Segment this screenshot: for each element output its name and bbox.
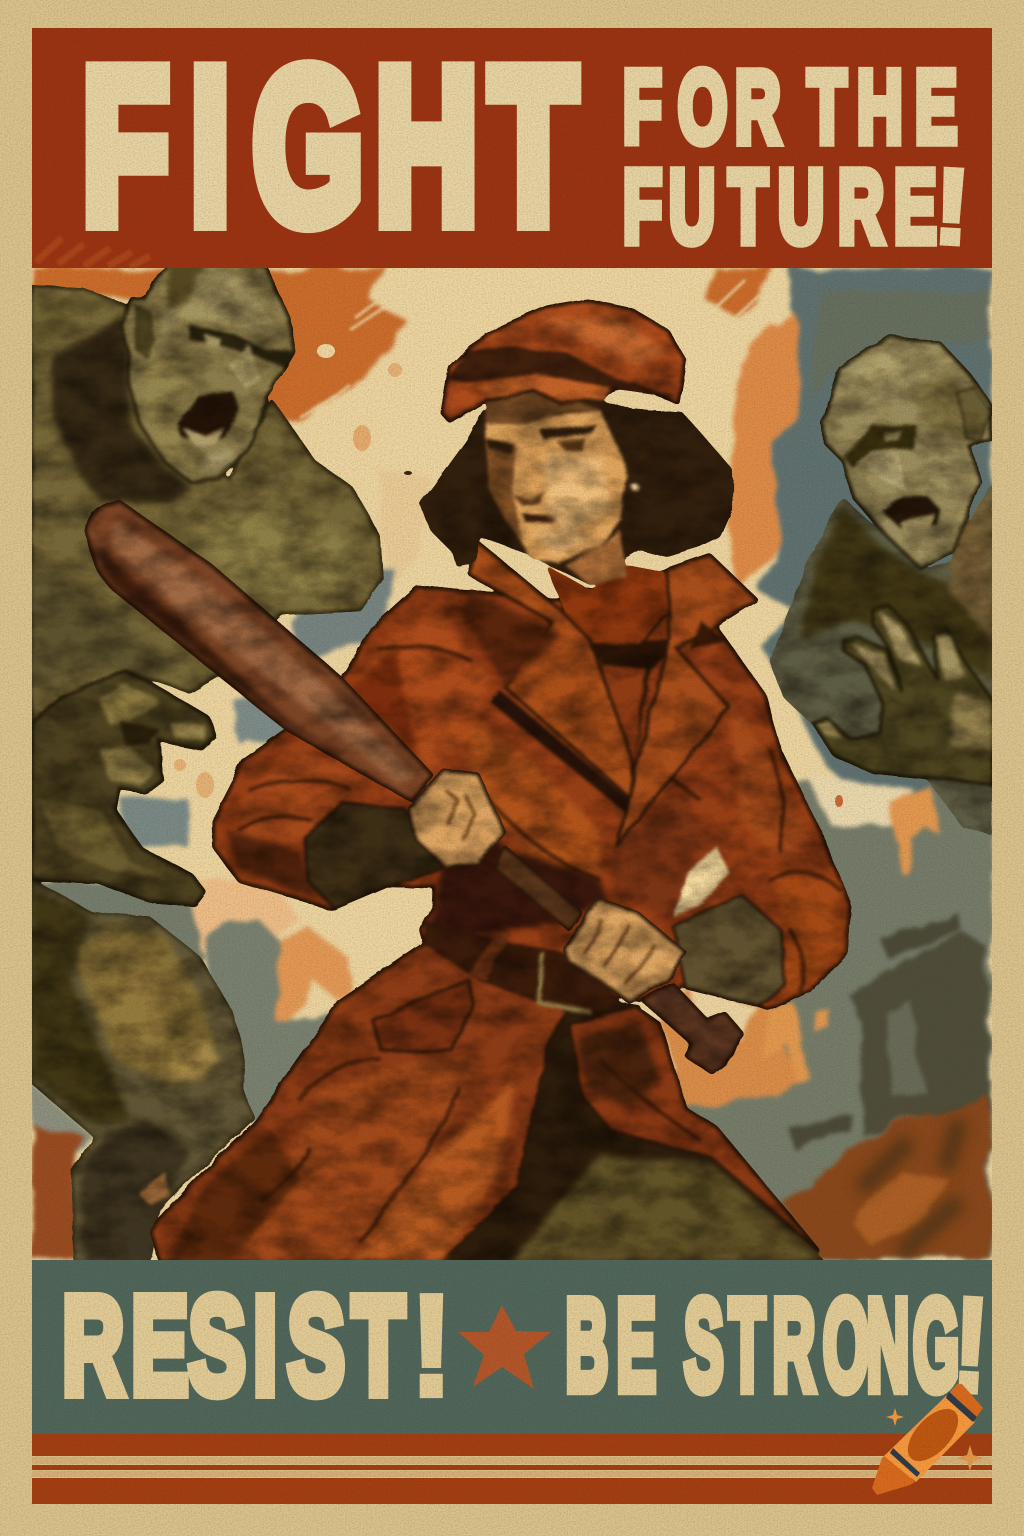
title: FIGHT: FIGHT: [82, 25, 577, 269]
bat handle: [495, 846, 582, 930]
bat highlight: [110, 520, 415, 785]
crayon body: [884, 1396, 975, 1482]
crayon bands: [890, 1392, 977, 1477]
fire detail: [850, 1170, 950, 1245]
fire right: [780, 1097, 990, 1260]
right cuff: [673, 895, 785, 1006]
collar and lapels: [460, 540, 757, 846]
icon: crayon logo: [872, 1384, 984, 1495]
belt: [425, 920, 620, 1013]
ogre head: [122, 251, 295, 483]
crayon cap: [950, 1384, 983, 1418]
sky and explosion background: [32, 268, 992, 1260]
woman head: [420, 300, 733, 630]
ogre chest shadow: [800, 505, 992, 680]
paint debris: [174, 344, 843, 812]
ogre chest highlight: [200, 500, 360, 600]
slogan: exclamation mark: !: [410, 1265, 453, 1427]
baseball bat: [87, 501, 742, 1073]
ogre hand: [813, 604, 992, 785]
ruins right: [790, 912, 992, 1150]
slogan: exclamation mark: !: [949, 1268, 993, 1421]
slogan: BE STRONG: BE STRONG: [565, 1274, 959, 1418]
banner brush streaks: [36, 238, 150, 267]
top banner: [32, 25, 992, 269]
bat shadow: [95, 545, 380, 780]
right ogre: [770, 336, 992, 835]
coat skirt: [150, 944, 820, 1262]
cream streaks: [300, 280, 760, 418]
illustration panel: [32, 251, 992, 1262]
face: [485, 388, 627, 562]
ogre body: [770, 480, 992, 835]
earring: [632, 484, 638, 490]
bat knob: [642, 984, 742, 1073]
ogre hand: [32, 670, 215, 905]
gripping hands: [408, 770, 686, 1002]
crayon tip: [872, 1455, 915, 1495]
left ogre: [32, 251, 382, 1262]
slogan: RESIST: RESIST: [62, 1269, 405, 1423]
crayon label: [899, 1400, 967, 1470]
title: FUTURE: FUTURE: [623, 149, 937, 265]
upper hand: [408, 770, 504, 868]
lower hand: [564, 899, 686, 1002]
left cuff: [304, 803, 443, 908]
title: FOR THE: FOR THE: [623, 49, 957, 164]
hair: [420, 400, 733, 585]
scarf: [560, 569, 680, 790]
ogre back highlight: [32, 300, 67, 357]
sparkle: [886, 1408, 904, 1426]
sparkle: [956, 1445, 984, 1471]
bottom stripes: [32, 1434, 992, 1504]
ogre thigh: [32, 880, 254, 1262]
cap: [442, 300, 685, 422]
coat torso and sleeves: [213, 587, 850, 1009]
bottom banner: [32, 1260, 993, 1436]
fire dark streaks: [860, 1120, 960, 1255]
icon: star: [458, 1305, 551, 1389]
coat folds: [240, 647, 840, 1240]
trousers: [443, 990, 825, 1262]
woman figure: [150, 540, 850, 1262]
bat barrel: [87, 501, 432, 801]
neck: [565, 530, 627, 585]
ogre back shadow: [52, 314, 192, 505]
title: exclamation mark: !: [930, 145, 974, 268]
ogre shoulder: [950, 490, 992, 640]
ogre lower torso shadow: [32, 560, 180, 690]
scarf wrap: [545, 565, 665, 630]
ogre head: [823, 336, 990, 568]
ogre torso: [32, 286, 382, 722]
